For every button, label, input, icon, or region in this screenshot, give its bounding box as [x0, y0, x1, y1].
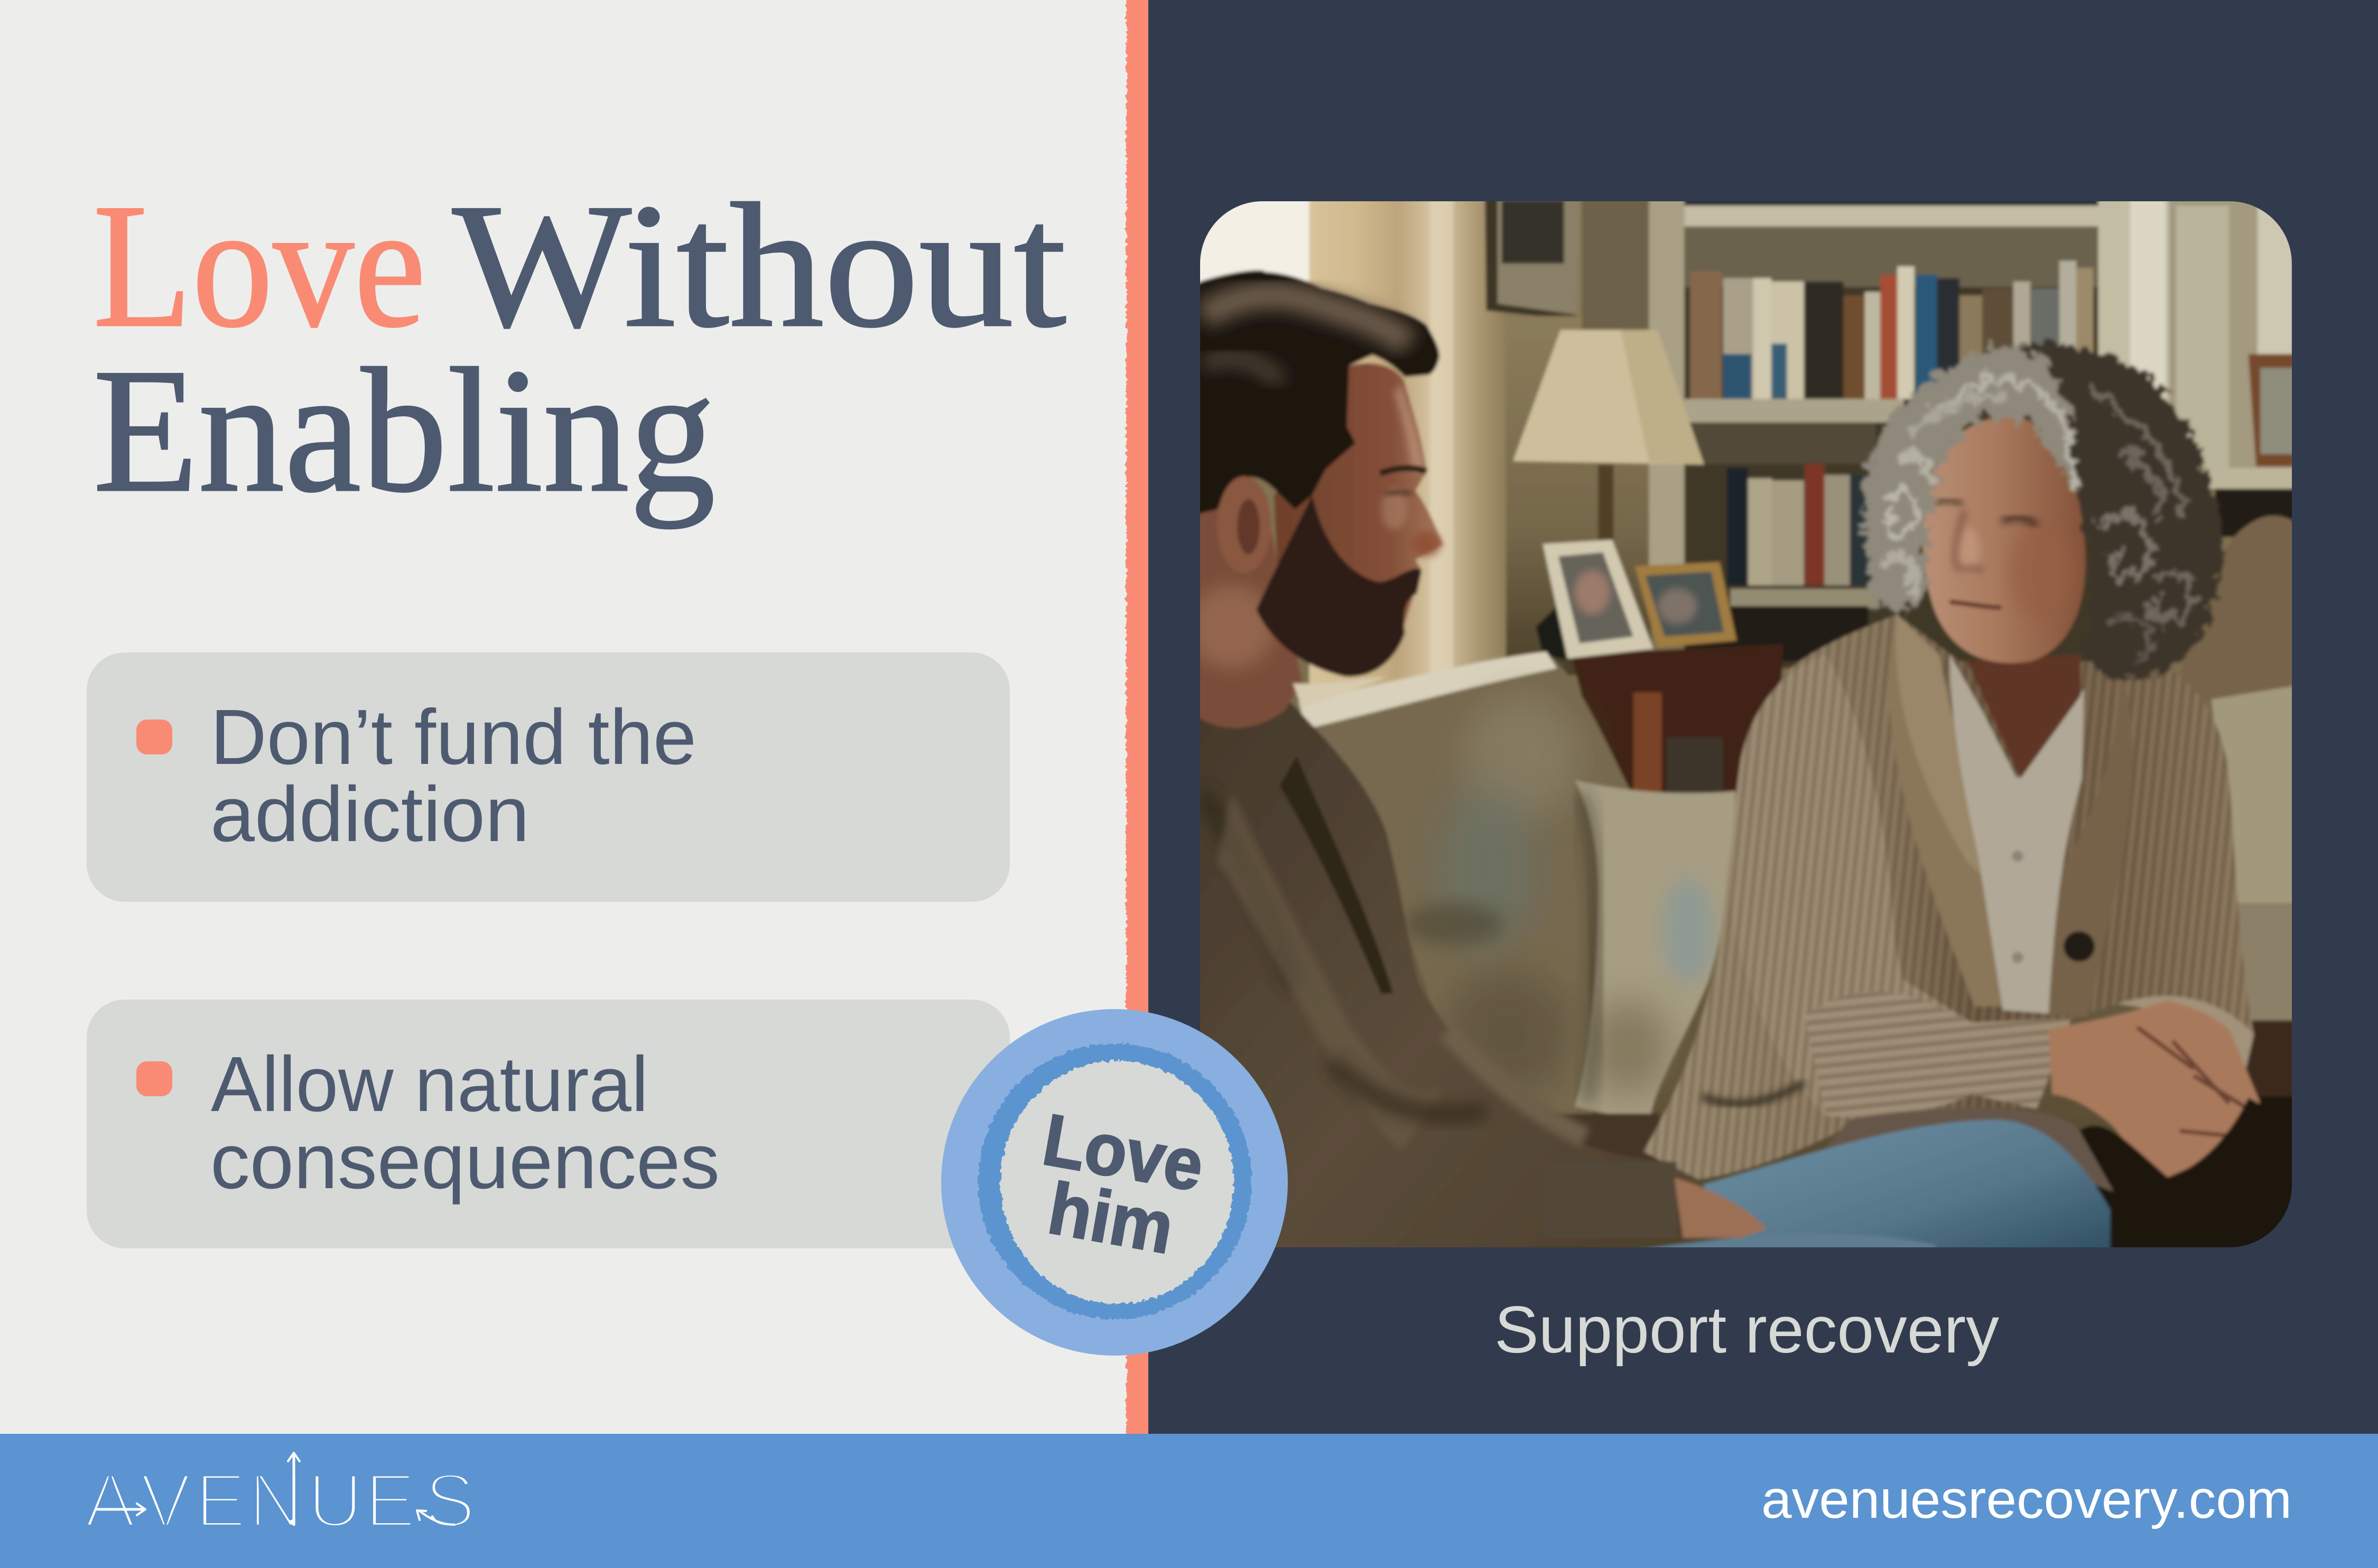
man hoodie — [1189, 682, 1682, 1253]
title — [93, 167, 1067, 529]
wall — [1506, 316, 1651, 675]
icon: bullet — [136, 720, 172, 754]
photo: man and older woman talking on a sofa — [1189, 185, 2321, 1290]
table and frames — [1571, 644, 1784, 792]
text: allow natural consequences — [210, 1041, 720, 1205]
panel: don't fund the addiction — [87, 652, 1010, 902]
jeans — [1703, 1120, 2110, 1253]
text: don't fund the addiction — [210, 694, 696, 858]
window and curtain — [1200, 201, 1312, 286]
woman cardigan — [1643, 614, 2254, 1179]
title: Without — [452, 167, 1067, 364]
background: left panel — [0, 0, 1152, 1568]
cardigan cuffs and pocket — [1805, 992, 2072, 1117]
badge: love him — [941, 1009, 1288, 1356]
panel: dark right background — [1148, 0, 2378, 1437]
man eye and hair — [1380, 468, 1427, 473]
knee dark trousers — [2079, 1098, 2321, 1290]
shirt — [1949, 655, 2084, 1013]
badge label — [1037, 1099, 1210, 1270]
cream behind man's neck — [1293, 677, 1387, 708]
man hand — [1675, 1178, 1767, 1238]
panel: allow natural consequences — [87, 1000, 1010, 1248]
icon: bullet — [136, 1061, 172, 1096]
man face — [1274, 363, 1444, 675]
text: support recovery: Support recovery — [1494, 1293, 2000, 1367]
collar — [1889, 614, 2003, 1006]
woman hair — [1857, 337, 2216, 673]
sofa back cushion — [1295, 653, 1631, 1117]
woman face — [1922, 416, 2085, 663]
woman hands — [2049, 1001, 2260, 1177]
framed picture — [1498, 201, 1579, 315]
text: allow natural consequences: consequences — [210, 1118, 720, 1205]
badge label: him — [1043, 1168, 1179, 1270]
text: don't fund the addiction: Don’t fund the — [210, 694, 696, 781]
pillow — [1575, 780, 1735, 1117]
text: don't fund the addiction: addiction — [210, 771, 530, 858]
bookshelf — [1649, 185, 1692, 572]
text: allow natural consequences: Allow natural — [211, 1041, 648, 1128]
man beard — [1256, 495, 1422, 677]
badge label: Love — [1037, 1099, 1210, 1207]
coral torn divider strip — [1126, 0, 1158, 1448]
logo: avenues: AVENUES — [85, 1458, 476, 1543]
text: website url: avenuesrecovery.com — [1761, 1469, 2292, 1529]
right column — [2098, 185, 2172, 406]
man neck — [1189, 489, 1302, 728]
icon: logo arrows — [97, 1453, 454, 1525]
footer bar — [0, 1434, 2378, 1568]
lamp — [1513, 330, 1704, 464]
cardigan left sleeve — [1731, 655, 1972, 1117]
title: Love — [93, 167, 426, 364]
small frame on right — [2248, 354, 2295, 466]
title: Enabling — [93, 332, 716, 529]
armchair right — [2180, 516, 2303, 710]
